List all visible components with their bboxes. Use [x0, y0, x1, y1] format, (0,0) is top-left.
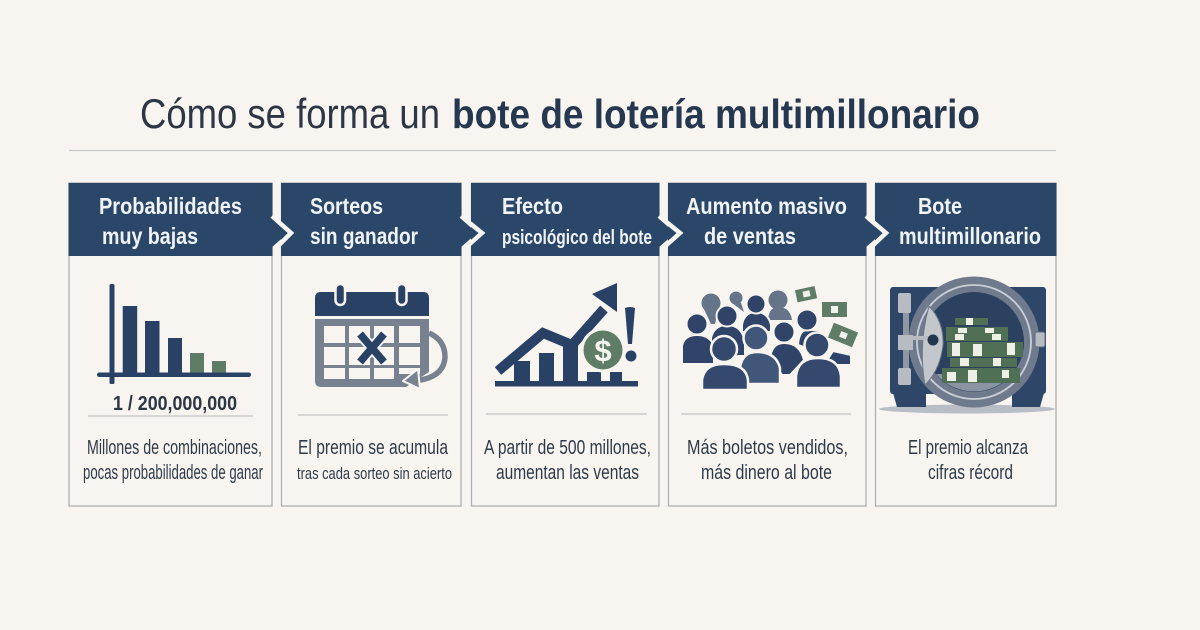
text: 500 millones: aumentan las ventas: [496, 462, 639, 484]
panel: probabilidades muy bajas: [68, 183, 272, 506]
heading: probabilidades muy bajas: Probabilidades: [99, 193, 242, 219]
heading: aumento masivo de ventas: [686, 193, 847, 249]
icon: open vault with money: [879, 276, 1055, 414]
panel: bote multimillonario: [875, 183, 1056, 506]
heading: bote multimillonario: Bote: [918, 193, 962, 219]
odds figure: 1 / 200,000,000: [113, 393, 237, 415]
heading: sorteos sin ganador: sin ganador: [310, 223, 418, 249]
heading: aumento masivo de ventas: de ventas: [704, 223, 796, 249]
panel: sorteos sin ganador: [281, 183, 462, 506]
heading: sorteos sin ganador: [310, 193, 418, 249]
title: bote de lotería multimillonario: [452, 91, 980, 137]
heading: efecto psicológico del bote: [502, 193, 652, 249]
text: cifras récord: cifras récord: [928, 462, 1013, 484]
heading: efecto psicológico del bote: Efecto: [502, 193, 563, 219]
arrow: step 2 to 3: [460, 216, 482, 250]
heading: aumento masivo de ventas: Aumento masivo: [686, 193, 847, 219]
panel: aumento masivo de ventas: [668, 183, 866, 506]
icon: rising chart with dollar: [495, 283, 638, 386]
heading: sorteos sin ganador: Sorteos: [310, 193, 383, 219]
text: cifras récord: [908, 437, 1029, 484]
text: combinaciones: Millones de combinaciones,: [87, 437, 262, 459]
icon: rising chart with dollar: $: [594, 333, 612, 368]
arrow: step 1 to 2: [271, 216, 291, 250]
heading: probabilidades muy bajas: muy bajas: [102, 223, 198, 249]
panel: efecto psicológico: [471, 183, 660, 506]
arrow: step 4 to 5: [865, 216, 886, 250]
text: premio se acumula: tras cada sorteo sin acierto: [297, 464, 452, 483]
text: premio se acumula: El premio se acumula: [298, 437, 449, 459]
heading: efecto psicológico del bote: psicológico del bote: [502, 227, 652, 249]
title: [140, 90, 980, 137]
bar chart: descending odds: [97, 284, 251, 384]
icon: calendar with cross: [315, 284, 445, 389]
text: 500 millones: A partir de 500 millones,: [484, 437, 651, 459]
icon: crowd with banknotes: [682, 286, 858, 390]
heading: bote multimillonario: multimillonario: [899, 223, 1041, 249]
heading: probabilidades muy bajas: [99, 193, 242, 249]
text: más boletos: [687, 437, 848, 484]
text: premio se acumula: [297, 437, 452, 483]
text: más boletos: más dinero al bote: [701, 462, 832, 484]
text: combinaciones: pocas probabilidades de ganar: [83, 462, 263, 484]
heading: bote multimillonario: [899, 193, 1041, 249]
arrow: step 3 to 4: [658, 216, 680, 250]
title: Cómo se forma un: [140, 90, 440, 137]
text: 500 millones: [484, 437, 651, 484]
text: cifras récord: El premio alcanza: [908, 437, 1029, 459]
text: combinaciones: [83, 437, 263, 484]
text: más boletos: Más boletos vendidos,: [687, 437, 848, 459]
